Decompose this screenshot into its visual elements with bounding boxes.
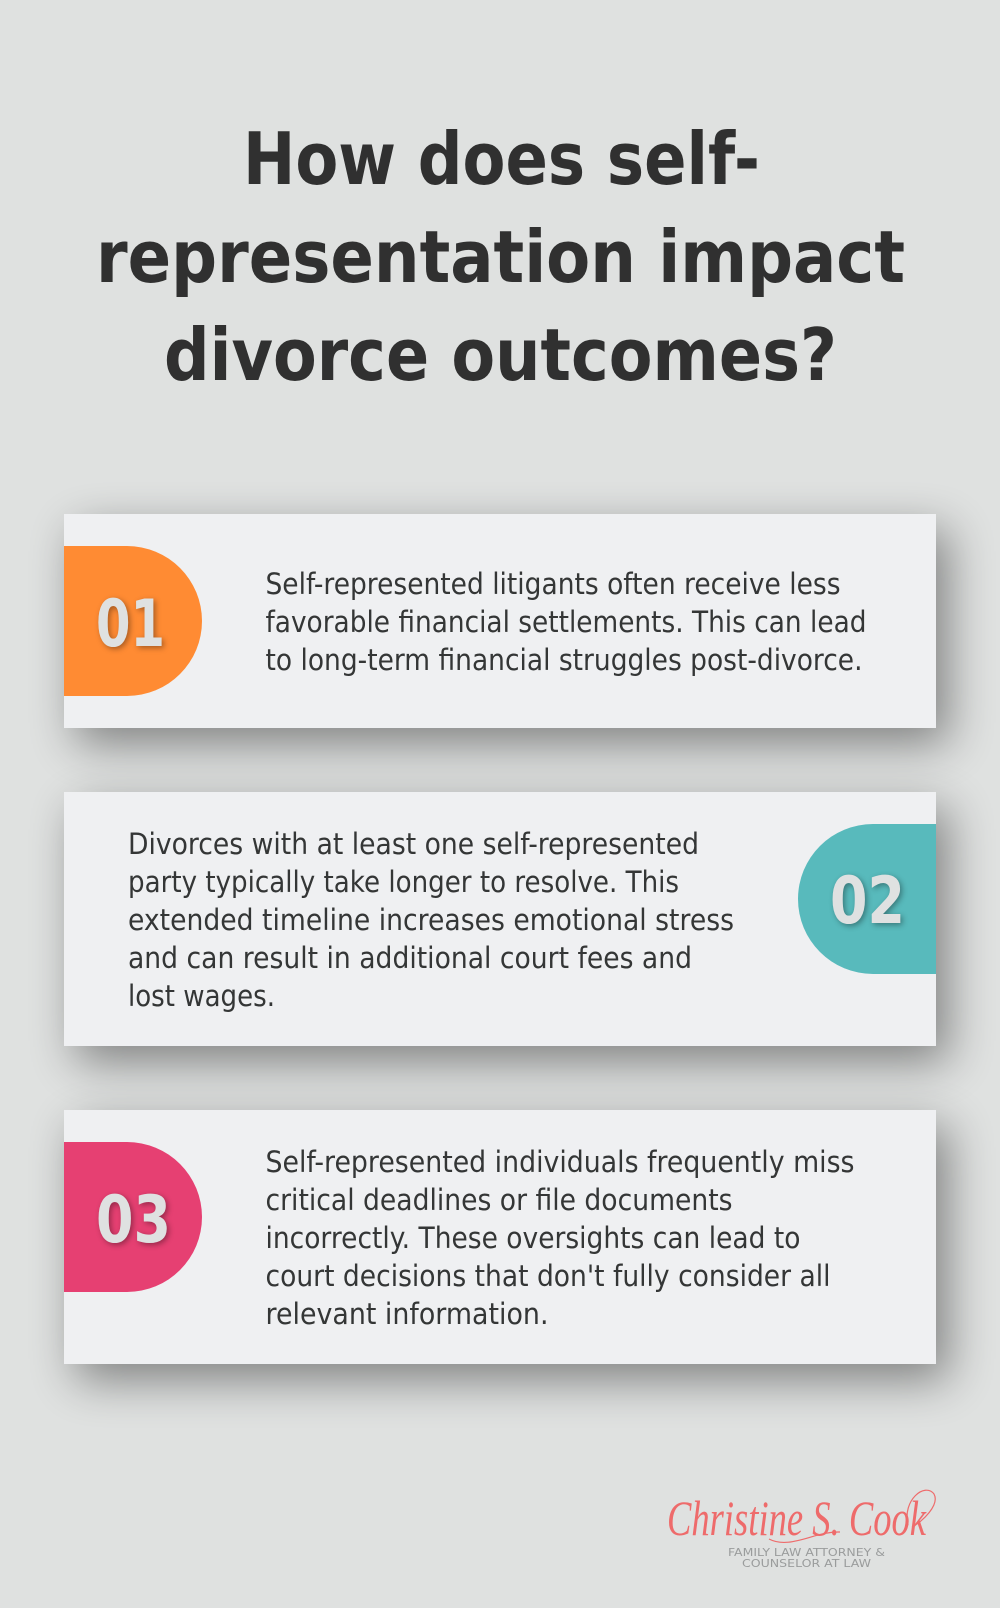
logo: Christine S. Cook: FAMILY LAW ATTORNEY & bbox=[728, 1547, 885, 1559]
title: divorce outcomes? bbox=[164, 313, 837, 397]
badge: 02: 02 bbox=[830, 864, 905, 939]
text: longer resolution: Divorces with at least one self-represented bbox=[128, 827, 699, 861]
text: longer resolution: lost wages. bbox=[128, 979, 275, 1013]
text: missed deadlines: Self-represented individuals frequently miss bbox=[266, 1145, 854, 1179]
logo: Christine S. Cook bbox=[667, 1490, 935, 1570]
text: financial settlements bbox=[266, 567, 866, 677]
badge: 03 bbox=[64, 1142, 202, 1292]
text: missed deadlines bbox=[266, 1145, 854, 1331]
badge: 01 bbox=[64, 546, 202, 696]
badge: 01: 01 bbox=[96, 587, 165, 662]
text: financial settlements: Self-represented litigants often receive less bbox=[266, 567, 840, 601]
text: missed deadlines: incorrectly. These oversights can lead to bbox=[266, 1221, 800, 1255]
text: financial settlements: favorable financial settlements. This can lead bbox=[266, 605, 866, 639]
title: representation impact bbox=[96, 215, 905, 299]
logo: Christine S. Cook: COUNSELOR AT LAW bbox=[742, 1558, 872, 1570]
title: How does self- bbox=[243, 117, 760, 201]
text: missed deadlines: court decisions that don't fully consider all bbox=[266, 1259, 830, 1293]
text: missed deadlines: critical deadlines or file documents bbox=[266, 1183, 732, 1217]
badge: 03: 03 bbox=[96, 1183, 171, 1258]
panel: longer resolution bbox=[64, 792, 948, 1062]
panel: financial settlements bbox=[64, 514, 948, 744]
text: longer resolution: party typically take longer to resolve. This bbox=[128, 865, 679, 899]
text: missed deadlines: relevant information. bbox=[266, 1297, 548, 1331]
text: longer resolution: extended timeline increases emotional stress bbox=[128, 903, 734, 937]
panel: missed deadlines bbox=[64, 1110, 948, 1380]
badge: 02 bbox=[798, 824, 936, 974]
text: longer resolution: and can result in additional court fees and bbox=[128, 941, 692, 975]
text: financial settlements: to long-term financial struggles post-divorce. bbox=[266, 643, 862, 677]
text: longer resolution bbox=[128, 827, 734, 1013]
title bbox=[96, 117, 905, 397]
